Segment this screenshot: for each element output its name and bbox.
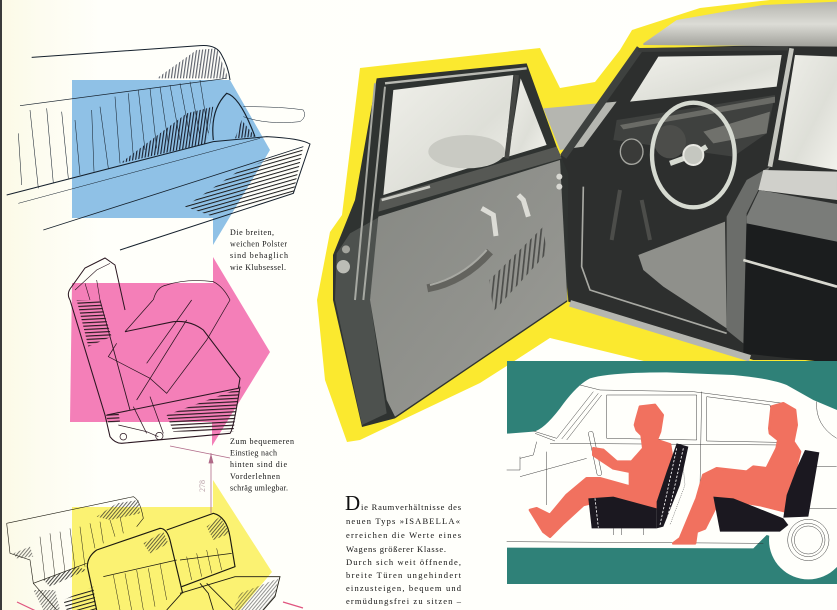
caption: seat cushions: sind behaglich [230, 251, 288, 260]
dimension lines [17, 446, 303, 610]
text block: interior dimensions [345, 491, 462, 606]
open door [333, 63, 568, 427]
text block: interior dimensions: Wagens größerer Klasse. [346, 544, 446, 554]
panel: pink folding seat illustration [68, 257, 270, 446]
caption: folding seats: Zum bequemeren [230, 437, 294, 446]
text block: interior dimensions: ie Raumverhältnisse des [361, 502, 461, 512]
dimension value: 278 [198, 480, 207, 492]
drop cap: D [345, 491, 360, 515]
blue arrow backdrop [72, 80, 270, 245]
driver silhouette [530, 405, 672, 537]
rear seat [713, 450, 819, 532]
passenger silhouette [673, 403, 800, 543]
panel: blue seat illustration [7, 46, 310, 250]
caption: seat cushions: weichen Polster [230, 240, 287, 248]
car body [543, 2, 837, 363]
yellow arrow backdrop [72, 480, 272, 610]
text block: interior dimensions: Durch sich weit öffnende, [346, 557, 461, 567]
blue seat line drawing [7, 46, 310, 250]
caption: folding seats [230, 437, 294, 492]
yellow backdrop [317, 0, 837, 442]
text block: interior dimensions: neuen Typs »ISABELLA« [346, 516, 460, 526]
panel: car interior photo [317, 0, 837, 442]
text block: interior dimensions: breite Türen ungehindert [346, 570, 462, 580]
caption: folding seats: schräg umlegbar. [230, 484, 288, 492]
caption: seat cushions [230, 228, 288, 272]
pink seat line drawing [68, 258, 240, 443]
front seat stitching [595, 448, 683, 528]
panel: yellow bench seat illustration [7, 446, 303, 610]
white notch [513, 338, 612, 362]
yellow seat line drawing [7, 497, 280, 610]
caption: seat cushions: wie Klubsessel. [230, 263, 286, 272]
pink arrow backdrop [70, 257, 270, 446]
front seat [588, 443, 688, 528]
caption: folding seats: hinten sind die [230, 460, 287, 469]
teal background [507, 361, 837, 584]
caption: seat cushions: Die breiten, [230, 228, 274, 237]
text block: interior dimensions: ermüdungsfrei zu sitzen – [346, 596, 462, 606]
text block: interior dimensions: erreichen die Werte eines [346, 530, 461, 540]
panel: teal side-view seating diagram [507, 361, 837, 584]
car silhouette and diagram [507, 372, 837, 579]
caption: folding seats: Vorderlehnen [230, 472, 280, 481]
caption: folding seats: Einstieg nach [230, 448, 277, 458]
text block: interior dimensions: einzusteigen, bequem und [346, 583, 462, 593]
